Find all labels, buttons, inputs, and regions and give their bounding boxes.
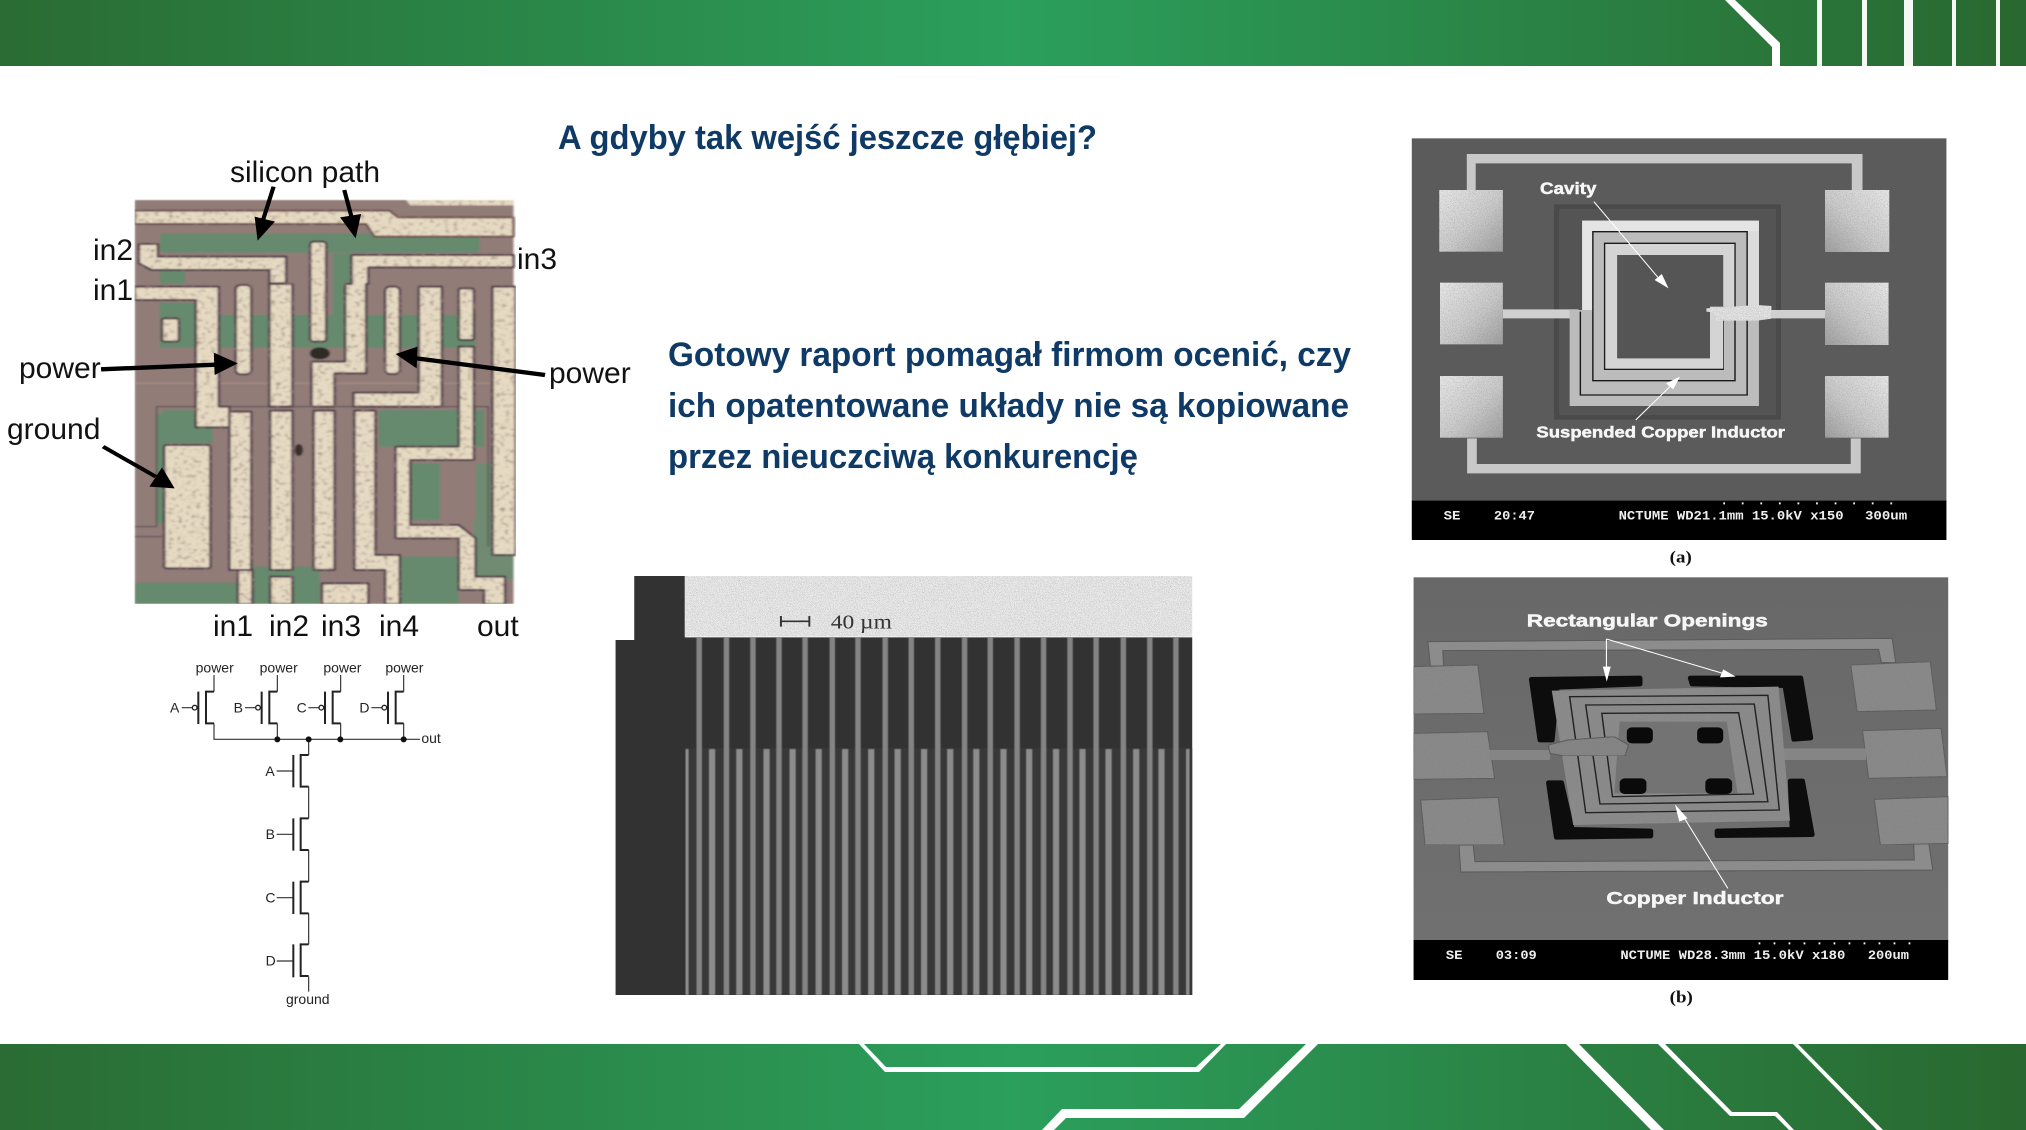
- cavity recess: [1556, 207, 1779, 417]
- rectangular openings: [1531, 678, 1812, 837]
- air bridge: [1706, 305, 1771, 321]
- frame trace: [1428, 638, 1933, 872]
- panel: CMOS NOR-gate schematic: A: [170, 699, 180, 715]
- arrows: [1603, 639, 1736, 888]
- panel: CMOS NOR-gate schematic: D: [359, 699, 369, 715]
- labels on chip: [7, 156, 631, 643]
- text block: main statement: przez nieuczciwą konkurencję: [668, 438, 1138, 476]
- panel: CMOS NOR-gate schematic: B: [234, 699, 243, 715]
- panel: SEM photo (b) inductor with rectangular openings: Copper Inductor: [1606, 888, 1784, 908]
- air bridge: [1548, 737, 1629, 756]
- panel: CMOS NOR-gate schematic: A: [265, 763, 275, 779]
- info bar: 300um: [1865, 509, 1907, 523]
- footer band with circuit traces: [0, 1044, 2026, 1130]
- panel: SEM photo (a) suspended copper inductor: [1412, 138, 1946, 540]
- spiral inductor: [1570, 221, 1759, 406]
- labels on chip: out: [477, 610, 519, 643]
- scale bar: [781, 616, 809, 627]
- title: A gdyby tak wejść jeszcze głębiej?: [558, 119, 1097, 157]
- contact pads: [1439, 190, 1503, 438]
- panel: CMOS NOR-gate schematic: C: [265, 889, 275, 905]
- panel: chip die photo with labels: [7, 156, 631, 643]
- panel: CMOS NOR-gate schematic: B: [266, 826, 275, 842]
- panel: CMOS NOR-gate schematic: C: [297, 699, 307, 715]
- text block: main statement: ich opatentowane układy nie są kopiowane: [668, 387, 1349, 425]
- info bar: NCTUME WD28.3mm 15.0kV x180: [1620, 948, 1845, 963]
- panel: CMOS NOR-gate schematic: [170, 660, 441, 1007]
- panel: CMOS NOR-gate schematic: out: [421, 730, 441, 746]
- text block: main statement: [668, 336, 1351, 476]
- labels on chip: in4: [379, 610, 419, 643]
- info bar: 200um: [1868, 948, 1909, 963]
- labels on chip: power: [549, 357, 631, 390]
- cavity holes: [1620, 727, 1732, 794]
- labels on chip: in2: [269, 610, 309, 643]
- panel: CMOS NOR-gate schematic: power: [323, 660, 362, 676]
- lighter header strip: [685, 576, 1192, 637]
- frame trace: [1467, 154, 1862, 473]
- arrows: [1594, 202, 1680, 420]
- caption (b): (b): [1670, 987, 1693, 1007]
- header band with circuit traces: [0, 0, 2026, 66]
- comb fingers: [686, 637, 1189, 995]
- labels on chip: in3: [321, 610, 361, 643]
- panel: SEM photo (a) suspended copper inductor: Suspended Copper Inductor: [1536, 423, 1786, 441]
- panel: CMOS NOR-gate schematic: ground: [286, 991, 330, 1007]
- top metal rail: [135, 211, 513, 237]
- labels on chip: in2: [93, 234, 133, 267]
- labels on chip: silicon path: [230, 156, 380, 189]
- panel: CMOS NOR-gate schematic: D: [266, 953, 276, 969]
- scale label: 40 µm: [831, 611, 892, 633]
- caption (a): (a): [1670, 547, 1692, 567]
- labels on chip: in1: [213, 610, 253, 643]
- panel: CMOS NOR-gate schematic: power: [385, 660, 424, 676]
- info bar: SE: [1446, 948, 1463, 963]
- panel: CMOS NOR-gate schematic: power: [260, 660, 298, 676]
- panel: CMOS NOR-gate schematic: power: [196, 660, 234, 676]
- labels on chip: in3: [517, 243, 557, 276]
- arrows on chip: [101, 187, 545, 488]
- leads: [1503, 309, 1825, 318]
- info bar: [1414, 940, 1948, 980]
- die photograph: [135, 200, 516, 604]
- text block: main statement: Gotowy raport pomagał firmom ocenić, czy: [668, 336, 1351, 374]
- labels: Rectangular Openings: [1527, 610, 1768, 631]
- labels on chip: in1: [93, 274, 133, 307]
- info bar: 03:09: [1496, 948, 1537, 963]
- panel: comb structure micrograph: [616, 576, 1192, 995]
- contact pads: [1414, 662, 1948, 845]
- info bar: NCTUME WD21.1mm 15.0kV x150: [1619, 509, 1844, 523]
- spiral inductor: [1552, 687, 1790, 825]
- labels: Cavity: [1540, 179, 1597, 198]
- panel: SEM photo (b) inductor with rectangular openings: [1414, 577, 1948, 980]
- info bar: [1412, 501, 1946, 540]
- info bar: SE: [1444, 509, 1460, 523]
- leads: [1489, 748, 1866, 760]
- labels on chip: power: [19, 352, 101, 385]
- labels on chip: ground: [7, 413, 100, 446]
- info bar: 20:47: [1494, 509, 1535, 523]
